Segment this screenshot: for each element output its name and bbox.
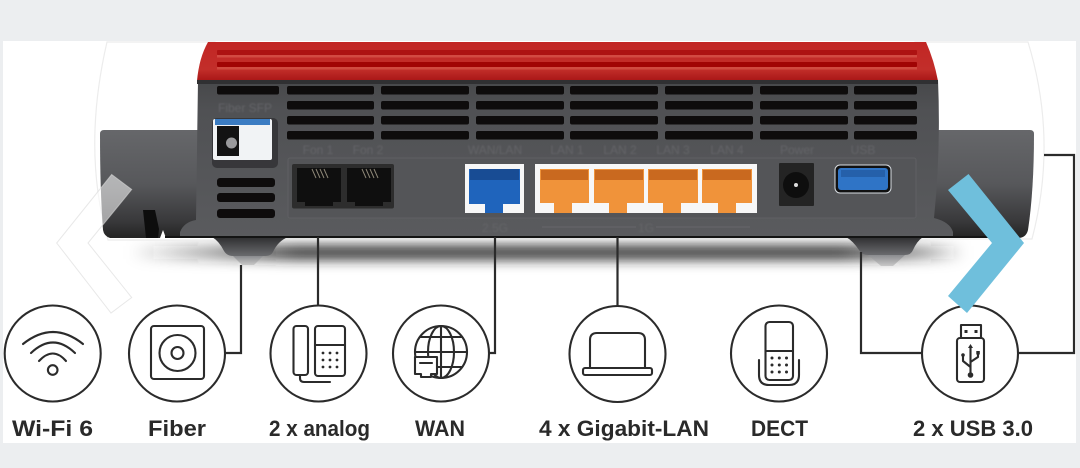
label: Fiber: Fiber xyxy=(148,416,206,441)
side notch xyxy=(143,210,159,238)
label: DECT: DECT xyxy=(751,416,809,441)
phone ports xyxy=(292,164,394,208)
WAN port xyxy=(465,164,524,213)
fiber SFP port xyxy=(212,118,278,168)
left side block xyxy=(100,130,210,238)
bottom edge xyxy=(165,236,1000,238)
port labels: Fon 1 xyxy=(303,143,334,157)
port labels: LAN 3 xyxy=(656,143,690,157)
router body xyxy=(180,80,953,238)
icon: DECT handset xyxy=(731,306,827,402)
port labels: USB xyxy=(851,143,875,157)
port labels: WAN/LAN xyxy=(468,143,522,157)
USB port xyxy=(835,165,891,193)
right white housing xyxy=(915,42,1044,239)
icon: analog phone xyxy=(270,306,366,402)
icon: WAN globe xyxy=(393,306,489,402)
LAN ports xyxy=(535,164,757,213)
port labels xyxy=(218,101,875,235)
connector lines xyxy=(225,155,1074,353)
icon: USB stick xyxy=(922,306,1018,402)
port labels: 1G xyxy=(638,221,654,235)
icon: fiber xyxy=(129,306,225,402)
icon: laptop xyxy=(570,306,666,402)
label: WAN: WAN xyxy=(415,416,465,441)
right foot xyxy=(846,237,923,266)
label: Wi-Fi 6: Wi-Fi 6 xyxy=(12,416,93,441)
router illustration xyxy=(95,42,1044,266)
label: 4 x Gigabit-LAN: 4 x Gigabit-LAN xyxy=(539,416,709,441)
left foot xyxy=(212,237,288,265)
floor shadow xyxy=(130,246,965,259)
icon: Wi-Fi xyxy=(5,306,101,402)
label: 2 x USB 3.0: 2 x USB 3.0 xyxy=(913,416,1033,441)
label: 2 x analog: 2 x analog xyxy=(269,416,370,441)
port labels: Power xyxy=(780,143,814,157)
port labels: LAN 4 xyxy=(710,143,744,157)
port labels: LAN 1 xyxy=(550,143,584,157)
port labels: LAN 2 xyxy=(603,143,637,157)
right side block xyxy=(930,130,1034,238)
arrow: previous xyxy=(57,174,132,313)
port labels: Fiber SFP xyxy=(218,101,272,115)
arrow: next xyxy=(948,174,1024,313)
port labels: Fon 2 xyxy=(353,143,384,157)
power socket xyxy=(779,163,814,206)
ventilation slots xyxy=(217,86,917,218)
left white housing xyxy=(95,42,215,240)
port labels: 2.5G xyxy=(482,221,508,235)
port panel xyxy=(288,158,916,218)
red top cover xyxy=(197,42,938,84)
